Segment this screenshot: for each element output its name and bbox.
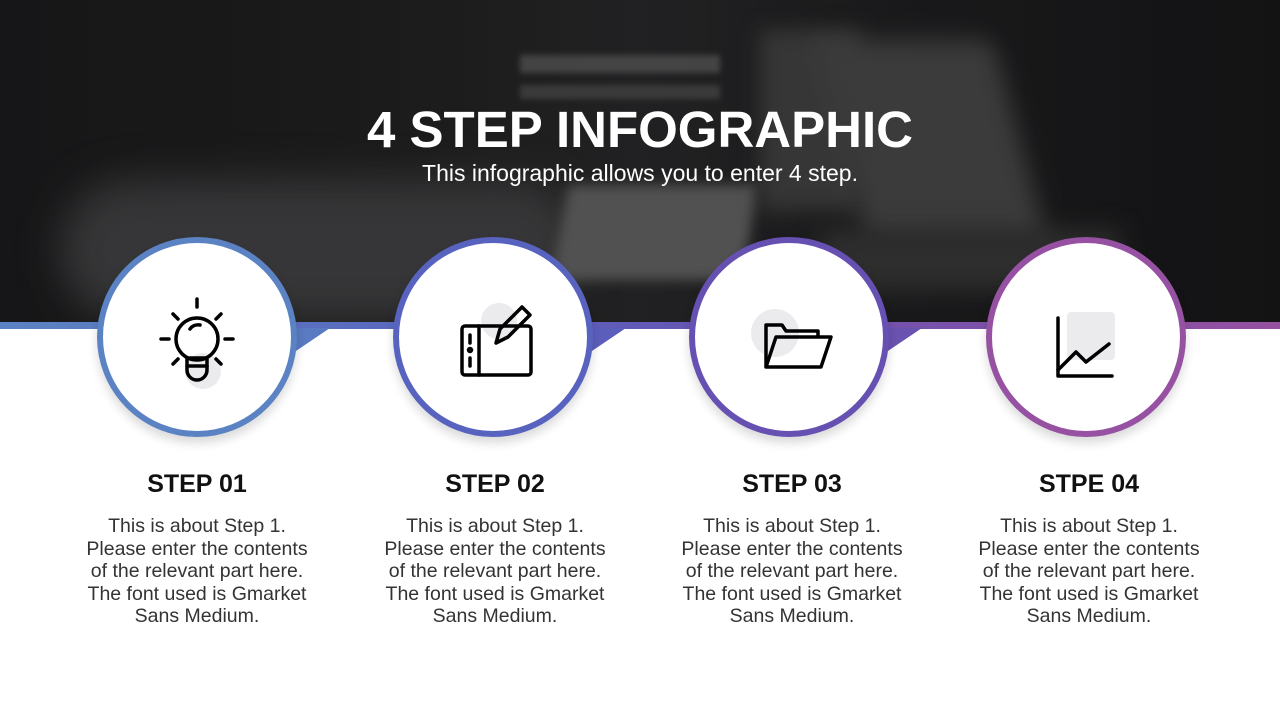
step 3 text: Please enter the contents	[681, 538, 903, 560]
step 1 text: The font used is Gmarket	[88, 582, 306, 604]
step 2 text: This is about Step 1.	[406, 515, 584, 537]
step 4 text: Sans Medium.	[1027, 605, 1151, 627]
step 1 text: This is about Step 1.	[108, 515, 286, 537]
step 2 text: STEP 02	[445, 470, 545, 498]
step 4 text	[978, 470, 1200, 627]
step 1 text: Please enter the contents	[86, 538, 308, 560]
step 3 text: This is about Step 1.	[703, 515, 881, 537]
step 4 text: The font used is Gmarket	[980, 582, 1198, 604]
step 4 text: This is about Step 1.	[1000, 515, 1178, 537]
step 4 text: Please enter the contents	[978, 538, 1200, 560]
subtitle: This infographic allows you to enter 4 step.	[422, 160, 858, 186]
step 2 text: of the relevant part here.	[389, 560, 601, 582]
step 3 text: The font used is Gmarket	[683, 582, 901, 604]
step 3 text: Sans Medium.	[730, 605, 854, 627]
step 1 text: STEP 01	[147, 470, 247, 498]
step 2 text: The font used is Gmarket	[386, 582, 604, 604]
step 3 text	[681, 470, 903, 627]
circle 4: chart	[986, 237, 1186, 437]
step 2 text: Sans Medium.	[433, 605, 557, 627]
circle 3: folder	[689, 237, 889, 437]
step 4 text: STPE 04	[1039, 470, 1139, 498]
step 3 text: of the relevant part here.	[686, 560, 898, 582]
gradient band	[0, 322, 1280, 329]
step 1 text: Sans Medium.	[135, 605, 259, 627]
title: 4 STEP INFOGRAPHIC	[367, 101, 913, 158]
step 1 text: of the relevant part here.	[91, 560, 303, 582]
step 3 text: STEP 03	[742, 470, 842, 498]
circle 2: drafting tablet	[393, 237, 593, 437]
step 4 text: of the relevant part here.	[983, 560, 1195, 582]
circle 1: lightbulb	[97, 237, 297, 437]
step 2 text: Please enter the contents	[384, 538, 606, 560]
step 1 text	[86, 470, 308, 627]
background photo (dark)	[0, 0, 1280, 325]
step 2 text	[384, 470, 606, 627]
